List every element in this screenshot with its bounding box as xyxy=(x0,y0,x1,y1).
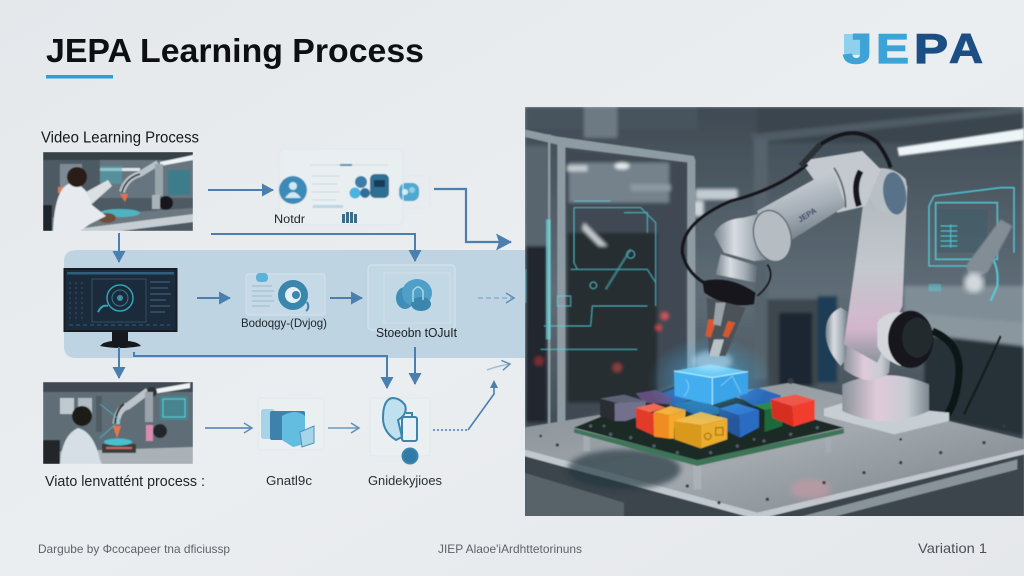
block: red right xyxy=(771,394,815,427)
card: middle right node xyxy=(368,265,455,330)
arrow: monitor to second thumbnail xyxy=(118,347,120,378)
block: red left xyxy=(636,403,666,436)
card outline xyxy=(279,149,403,225)
forearm tube xyxy=(757,169,846,259)
block: orange xyxy=(653,406,686,439)
photo: robot arm placing glowing cube xyxy=(524,106,1024,519)
icon: person circle xyxy=(279,176,307,204)
panel: highlighted middle band xyxy=(64,250,525,358)
arrow: monitor bus to bottom brain card xyxy=(134,352,387,388)
thumbnail: robot demonstration xyxy=(43,382,193,464)
card: middle left node xyxy=(246,273,325,315)
top joint xyxy=(878,168,908,186)
rear power cable xyxy=(932,331,959,414)
shoulder left housing xyxy=(826,308,849,366)
cables over arm xyxy=(682,164,807,286)
arrow: first thumbnail to monitor xyxy=(118,233,120,262)
forearm rear xyxy=(801,151,881,213)
robot arm xyxy=(682,133,1001,434)
block: blue front xyxy=(719,403,759,438)
circuit board xyxy=(574,383,844,489)
thumbnail: scientist with robot xyxy=(43,152,193,231)
logo letter P: P xyxy=(914,25,948,72)
icon: cluster xyxy=(399,183,419,201)
icon: ring circle xyxy=(278,280,308,311)
arrow: monitor to middle left card xyxy=(197,297,230,299)
beam glow xyxy=(692,351,732,371)
vertical link xyxy=(844,171,907,363)
logo letter A: A xyxy=(949,25,983,72)
hologram: right panel xyxy=(929,188,1014,301)
inner card outline xyxy=(384,273,450,323)
coloured blocks xyxy=(600,336,815,448)
cabinet interior xyxy=(566,149,687,423)
monitor bezel xyxy=(64,268,178,332)
arrow: top card elbow to photo xyxy=(434,189,511,242)
thumbnail: video screen monitor xyxy=(64,268,178,348)
logo square accent xyxy=(844,34,866,55)
icon: cyan tag xyxy=(256,273,268,282)
monitor screen xyxy=(66,270,176,330)
block: blue back left xyxy=(662,388,690,406)
factory background xyxy=(524,106,1024,519)
base cylinder xyxy=(842,375,929,421)
footer: center note: JIEP Alaoe'iArdhttetorinuns xyxy=(438,542,582,556)
table side frame xyxy=(525,454,1024,516)
card outline xyxy=(370,398,430,456)
arrow: bus to middle right card xyxy=(211,234,415,261)
title underline accent xyxy=(46,75,113,78)
icon: small glyph xyxy=(342,212,357,223)
wrist housing xyxy=(714,213,772,261)
block: grey xyxy=(600,395,646,421)
arrow: thumbnail to folder xyxy=(205,427,252,429)
arrow head: rising arrow xyxy=(490,380,498,388)
outer card outline xyxy=(368,265,455,330)
glowing cube xyxy=(674,364,748,405)
icon: outlined brain and battery xyxy=(383,398,418,464)
table xyxy=(524,378,1024,519)
background robot in hologram xyxy=(966,219,1012,279)
icon: connected nodes xyxy=(350,176,370,198)
block: blue back right xyxy=(737,388,781,406)
yoke xyxy=(844,346,890,380)
card: top node panel xyxy=(279,149,419,225)
hologram: left panel xyxy=(526,201,656,349)
footer: credit: Dargube by Φcocapeer tna dficiussp xyxy=(38,542,230,556)
label: Gnatl9c: Gnatl9c xyxy=(266,473,313,488)
arrow: dotted rise to photo xyxy=(433,383,494,430)
label: middle left node: Bodoqgy-(Dvjog) xyxy=(241,316,327,330)
ceiling light strip xyxy=(897,129,1024,156)
base plate xyxy=(824,403,949,434)
floor cable xyxy=(964,336,1001,414)
label: scientist step: Viato lenvattént process : xyxy=(45,474,205,490)
cube glow xyxy=(651,340,770,420)
logo letter E: E xyxy=(876,25,909,72)
arm logo marking: JEPA xyxy=(796,206,818,224)
arrow: middle right down to bottom brain xyxy=(414,347,416,384)
arrows: flow connectors xyxy=(119,189,514,430)
title: JEPA Learning Process xyxy=(46,33,424,70)
arrow: faded output right xyxy=(487,364,510,370)
neck xyxy=(716,254,757,283)
label: Gnidekyjioes: Gnidekyjioes xyxy=(368,473,442,488)
card outline xyxy=(258,398,324,450)
card outline xyxy=(246,274,325,315)
card text lines xyxy=(252,286,274,306)
arrow: thumbnail to top card xyxy=(208,189,273,191)
arrow: folder to brain xyxy=(328,427,359,429)
icon: robot head xyxy=(370,174,389,198)
arrow: dashed faded output xyxy=(478,297,514,299)
card text lines xyxy=(310,165,388,207)
shoulder housing xyxy=(876,312,903,366)
wrist disc xyxy=(748,206,797,266)
footer: variation label: Variation 1 xyxy=(918,540,987,556)
icon: brain blob xyxy=(396,279,432,311)
logo letter J: J xyxy=(843,25,872,72)
card: bottom folder node xyxy=(258,398,324,450)
cabinet frame xyxy=(524,129,696,424)
block: green xyxy=(754,402,782,432)
gripper xyxy=(707,298,746,356)
gripper ring xyxy=(702,279,756,305)
logo: JEPA xyxy=(843,25,983,72)
label: middle right node: Stoeobn tOJuIt xyxy=(376,326,458,340)
table top xyxy=(524,383,1024,519)
label: Notdr: Notdr xyxy=(274,212,305,226)
block: blue mid xyxy=(671,400,719,414)
card side tab xyxy=(403,176,430,208)
card: bottom brain node xyxy=(370,398,430,464)
block: yellow front xyxy=(674,412,727,448)
section heading: Video Learning Process xyxy=(41,130,199,146)
block: purple xyxy=(636,390,671,404)
shoulder motor disc xyxy=(888,311,933,368)
monitor stand xyxy=(100,332,141,348)
icon: folder stack xyxy=(261,409,314,447)
arrow: middle left to middle right card xyxy=(330,297,362,299)
